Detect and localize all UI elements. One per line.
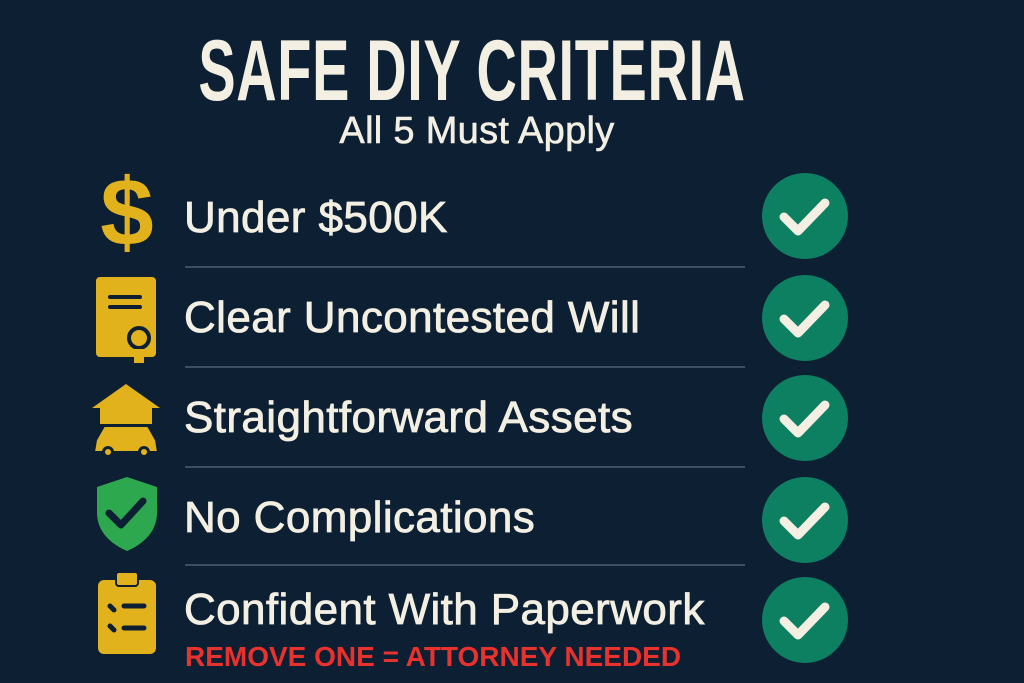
- item 5: Confident With Paperwork: [184, 585, 705, 634]
- subtitle: All 5 Must Apply: [339, 110, 615, 152]
- icon: dollar: $: [100, 159, 154, 266]
- icon: will document: [96, 277, 156, 363]
- icon: clipboard: [98, 573, 156, 654]
- icon: house and car: [92, 384, 160, 455]
- title: SAFE DIY CRITERIA: [198, 23, 746, 119]
- item 2: Clear Uncontested Will: [184, 293, 640, 342]
- checks: [762, 173, 848, 663]
- item 4: No Complications: [184, 493, 535, 542]
- warning: REMOVE ONE = ATTORNEY NEEDED: [185, 641, 681, 672]
- item 1: Under $500K: [184, 193, 448, 242]
- item 3: Straightforward Assets: [184, 393, 633, 442]
- icon: shield check: [97, 477, 157, 551]
